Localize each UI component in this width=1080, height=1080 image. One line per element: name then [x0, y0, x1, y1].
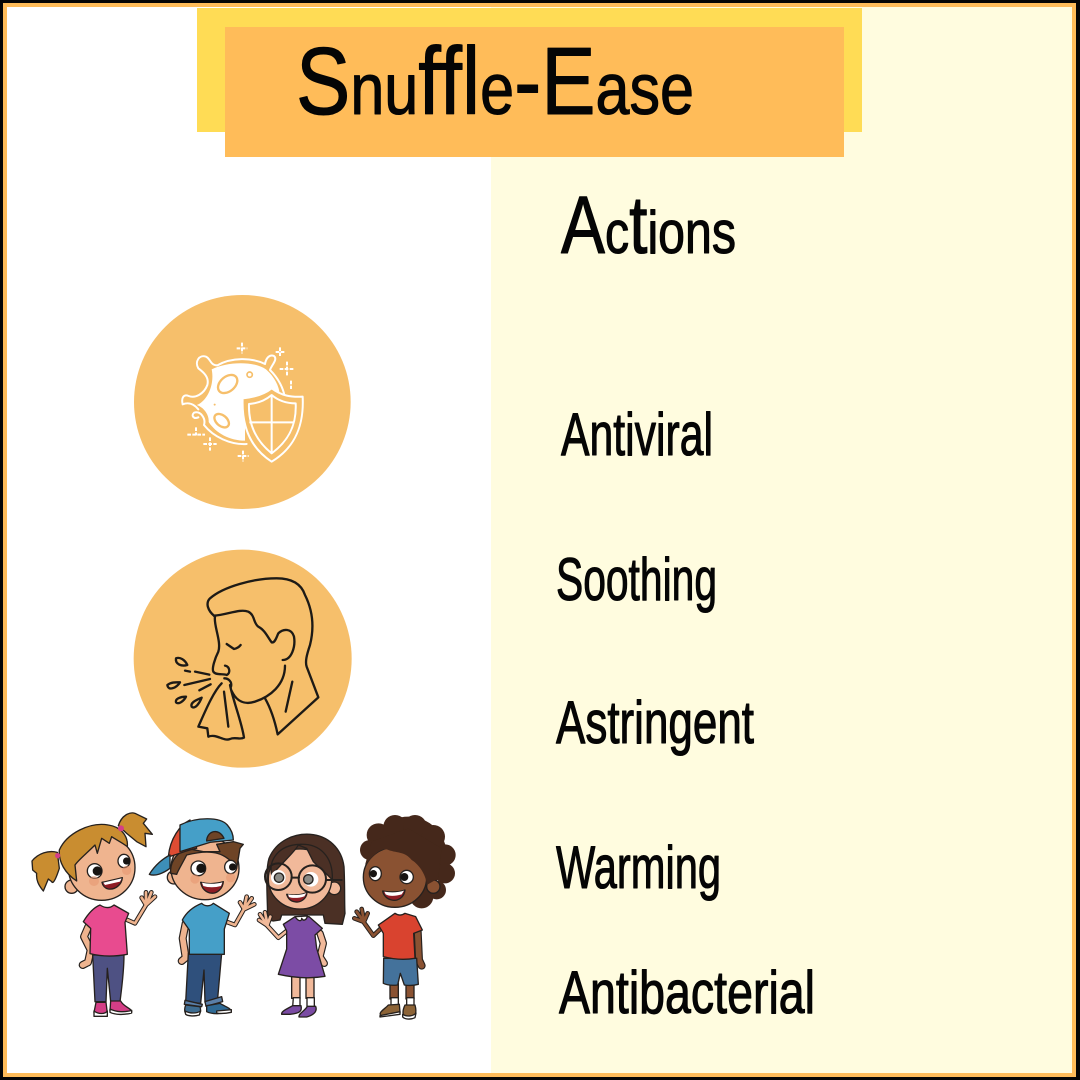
illustration: four children waving — [32, 813, 456, 1019]
icon: person sneezing into tissue — [134, 550, 352, 768]
icon: virus with shield — [134, 295, 351, 509]
child: girl in pink shirt — [32, 813, 155, 1016]
title: Snuffle-Ease — [296, 28, 694, 135]
title banner — [197, 8, 862, 157]
action: Antiviral: Antiviral — [561, 401, 713, 468]
heading: Actions: Actions — [561, 180, 736, 271]
action: Warming: Warming — [556, 834, 721, 901]
panel: cream actions column — [491, 7, 1072, 1073]
action: Antibacterial: Antibacterial — [559, 959, 815, 1026]
child: girl with glasses and purple dress — [259, 834, 345, 1017]
action: Soothing: Soothing — [556, 546, 717, 613]
list of actions — [556, 401, 815, 1026]
child: boy in blue cap — [149, 819, 254, 1016]
action: Astringent: Astringent — [556, 689, 754, 756]
child: boy with curly hair and red shirt — [354, 815, 456, 1019]
